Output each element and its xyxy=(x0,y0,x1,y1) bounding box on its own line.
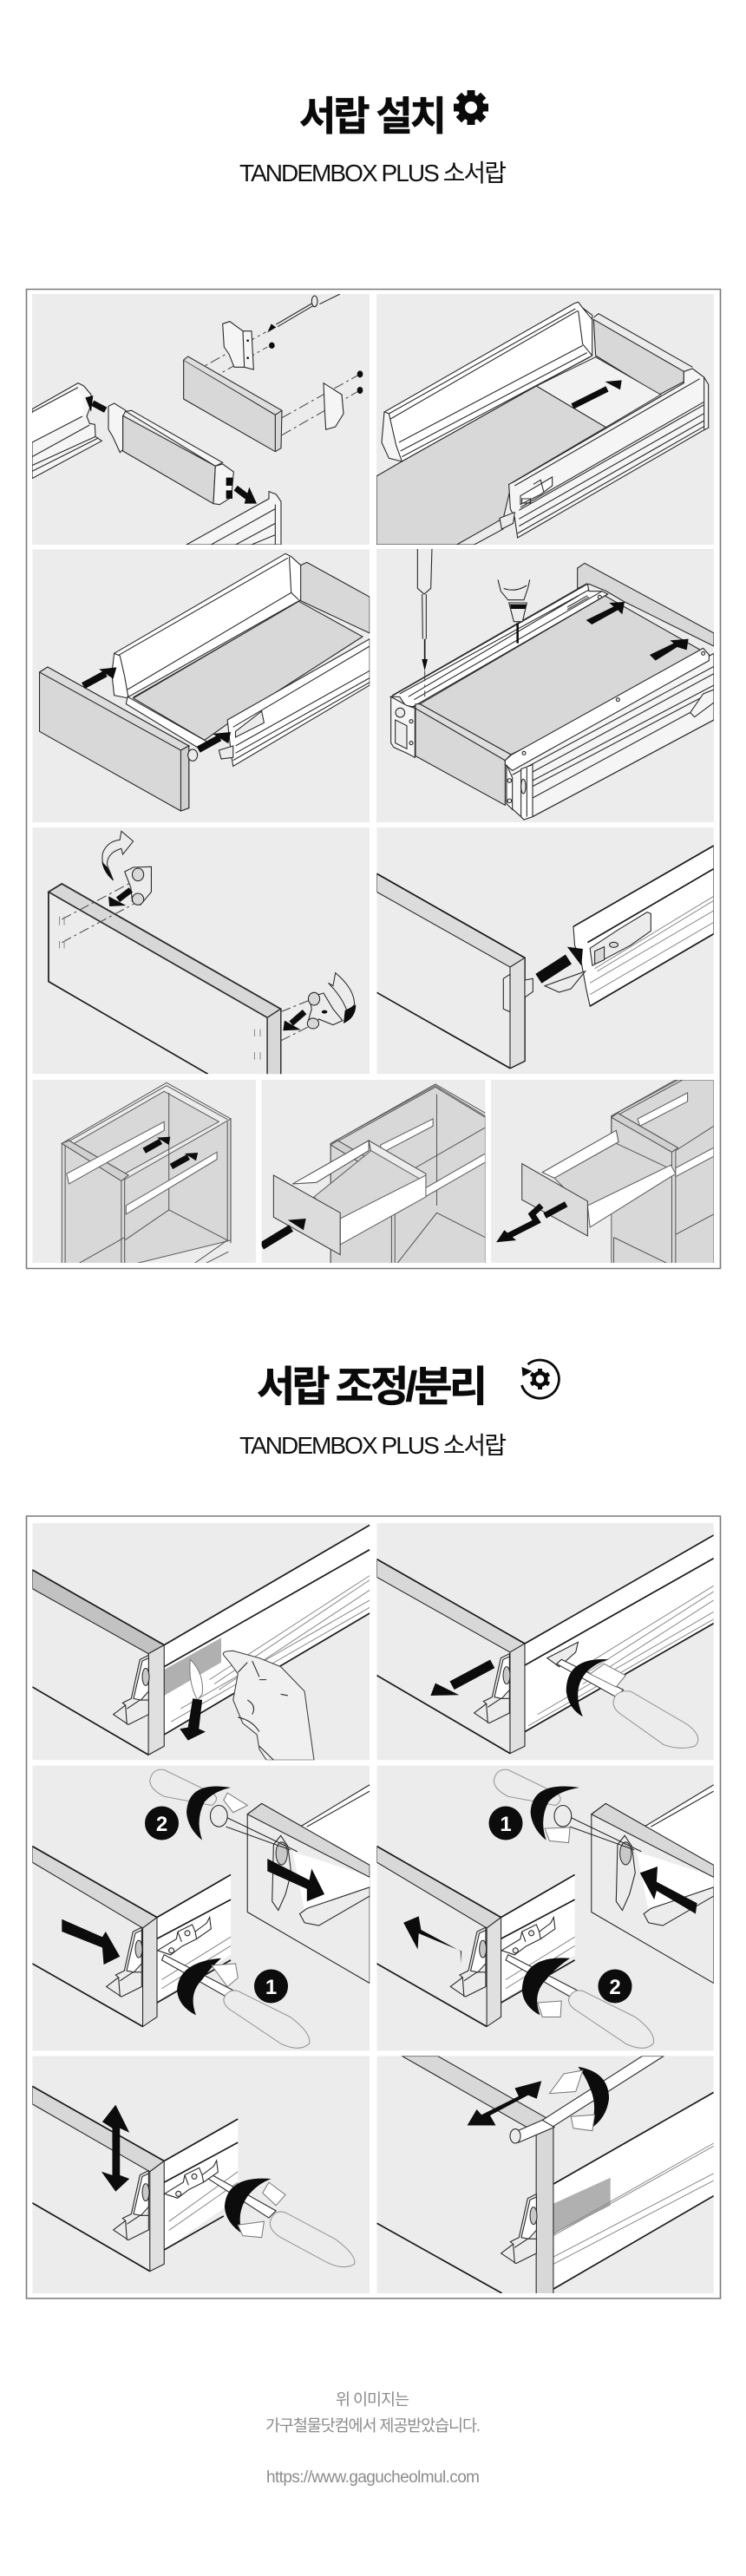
callout: step 1 xyxy=(489,1806,522,1840)
icon: gear xyxy=(454,90,488,125)
subtitle: product name: TANDEMBOX PLUS 소서랍 xyxy=(239,1432,507,1459)
callout: step 1: 1 xyxy=(265,1976,277,1999)
callout: step 2: 2 xyxy=(156,1813,167,1836)
icon: rail slot xyxy=(165,2161,218,2198)
title: drawer adjustment and removal: 서랍 조정/분리 xyxy=(257,1364,488,1410)
callout: step 2 xyxy=(145,1806,179,1840)
panel: depth adjustment reversed xyxy=(376,1766,714,2050)
callout: step 1 xyxy=(254,1969,288,2004)
icon: clip bracket xyxy=(450,1927,487,1997)
subtitle: product name: TANDEMBOX PLUS 소서랍 xyxy=(239,160,507,186)
text block: image source note: 위 이미지는 xyxy=(336,2390,409,2409)
icon: rail slot xyxy=(501,1917,555,1955)
panel: installation steps frame xyxy=(26,290,720,1268)
panel: turn screw with screwdriver xyxy=(376,1523,714,1760)
icon: rail slot xyxy=(158,1917,211,1955)
panel: removing drawer from cabinet xyxy=(491,1080,714,1266)
icon: clip bracket xyxy=(474,1654,510,1723)
panel: cabinet rails fitted xyxy=(32,1080,256,1266)
panel: attach back panel to rails xyxy=(32,294,370,545)
panel: release clip by hand xyxy=(32,1523,370,1760)
panel: attach front panel xyxy=(32,549,370,822)
title: drawer installation: 서랍 설치 xyxy=(299,94,447,139)
icon: clip bracket xyxy=(107,1927,142,1997)
panel: depth adjustment step 1 and 2 xyxy=(32,1766,370,2050)
icon: rotating gear xyxy=(522,1360,559,1398)
panel: screw fixing with screwdriver and drill xyxy=(376,548,714,822)
panel: slide in bottom board xyxy=(376,294,714,545)
panel: insert connectors into front panel xyxy=(32,827,370,1076)
icon: clip bracket xyxy=(501,2194,537,2264)
icon: clip bracket xyxy=(114,2171,149,2240)
text block: image source note: 가구철물닷컴에서 제공받았습니다. xyxy=(265,2416,481,2435)
text block: image source note xyxy=(265,2390,481,2435)
text block: source url: https://www.gagucheolmul.com xyxy=(266,2468,480,2487)
callout: step 1: 1 xyxy=(500,1813,512,1836)
callout: step 2 xyxy=(599,1969,631,2004)
panel: inserting drawer into cabinet xyxy=(262,1080,485,1266)
callout: step 2: 2 xyxy=(609,1976,621,1999)
panel: adjustment steps frame xyxy=(26,1516,720,2298)
icon: clip bracket xyxy=(114,1655,149,1724)
panel: side adjustment and removal xyxy=(376,2056,714,2296)
panel: clip drawer to front xyxy=(376,827,714,1074)
panel: height adjustment xyxy=(32,2056,370,2293)
